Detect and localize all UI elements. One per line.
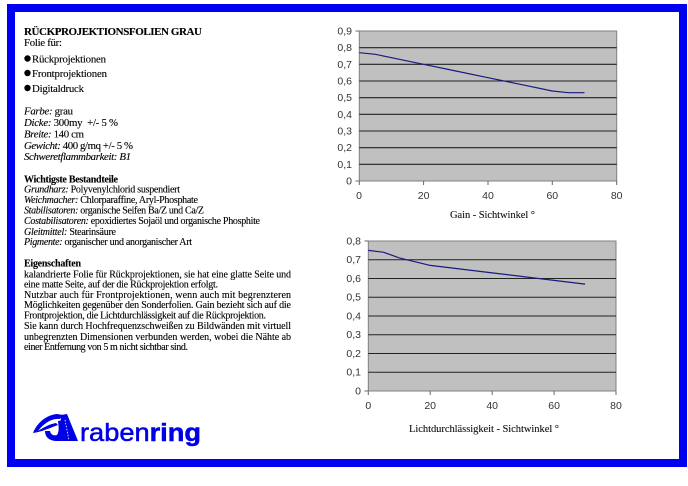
- properties: Frontprojektion, die Lichtdurchlässigkeit auf die Rückprojektion.: [24, 310, 266, 322]
- properties: eine matte Seite, auf der die Rückprojektion erfolgt.: [24, 280, 218, 290]
- x axis labels: 40: [482, 190, 494, 202]
- panel: product text: [23, 25, 292, 353]
- ingredients: Gleitmittel: Stearinsäure: [24, 227, 117, 238]
- logo: Grabenring: [33, 414, 201, 447]
- y axis labels: 0,3: [337, 126, 352, 138]
- grid lines: [359, 48, 617, 164]
- y axis labels: 0,3: [346, 329, 361, 341]
- logo wordmark: rabenring: [80, 419, 201, 447]
- data line: [368, 250, 585, 284]
- y axis labels: 0,2: [337, 142, 352, 154]
- properties: [24, 258, 292, 353]
- x axis labels: [365, 400, 622, 412]
- x axis labels: 80: [611, 190, 623, 202]
- y axis labels: 0,1: [346, 366, 361, 378]
- y axis labels: [337, 26, 352, 188]
- properties: Eigenschaften: [24, 258, 81, 270]
- axis ticks: [356, 31, 617, 185]
- ingredients: Costabilisatoren: epoxidiertes Sojaöl und organische Phosphite: [24, 216, 261, 227]
- x axis labels: 0: [365, 400, 371, 412]
- y axis labels: 0,1: [337, 159, 352, 171]
- x axis labels: 60: [546, 190, 558, 202]
- specifications: Gewicht: 400 g/mq +/- 5 %: [24, 140, 133, 152]
- use list: Frontprojektionen: [32, 68, 108, 80]
- y axis labels: 0: [346, 176, 352, 188]
- icon: logo mark: [33, 414, 78, 441]
- specifications: [23, 106, 133, 163]
- ingredients: Weichmacher: Chlorparaffine, Aryl-Phosphate: [24, 195, 199, 206]
- properties: unbegrenzten Dimensionen verbunden werden, wobei die Nähte ab: [24, 332, 291, 343]
- data line: [359, 53, 584, 93]
- x axis labels: 20: [418, 190, 430, 202]
- specifications: Breite: 140 cm: [24, 128, 85, 140]
- line chart: Lichtdurchlässigkeit - Sichtwinkel: [346, 236, 622, 435]
- ingredients: Wichtigste Bestandteile: [24, 174, 119, 186]
- plot area: [359, 31, 617, 181]
- y axis labels: 0,4: [346, 310, 361, 322]
- x axis labels: 40: [486, 400, 498, 412]
- ingredients: Stabilisatoren: organische Seifen Ba/Z und Ca/Z: [24, 206, 204, 216]
- use list: Folie für:: [24, 37, 62, 49]
- y axis labels: 0,8: [346, 236, 361, 248]
- grid lines: [368, 260, 616, 372]
- y axis labels: 0,5: [337, 92, 352, 104]
- properties: kalandrierte Folie für Rückprojektionen, sie hat eine glatte Seite und: [24, 270, 291, 280]
- x axis labels: 0: [356, 190, 362, 202]
- y axis labels: 0,5: [346, 292, 361, 304]
- y axis labels: 0,2: [346, 348, 361, 360]
- properties: Nutzbar auch für Frontprojektionen, wenn auch mit begrenzteren: [24, 290, 291, 301]
- y axis labels: [346, 236, 361, 398]
- y axis labels: 0,6: [346, 273, 361, 285]
- use list: Rückprojektionen: [32, 54, 107, 66]
- axis ticks: [364, 241, 616, 395]
- x axis labels: 60: [548, 400, 560, 412]
- axis title: Gain - Sichtwinkel °: [450, 210, 535, 221]
- y axis labels: 0,4: [337, 109, 352, 121]
- y axis labels: 0,7: [337, 59, 352, 71]
- y axis labels: 0,8: [337, 42, 352, 54]
- y axis labels: 0,7: [346, 254, 361, 266]
- x axis labels: 20: [424, 400, 436, 412]
- y axis labels: 0,6: [337, 76, 352, 88]
- specifications: Farbe: grau: [23, 106, 74, 118]
- properties: Sie kann durch Hochfrequenzschweißen zu Bildwänden mit virtuell: [24, 321, 291, 332]
- y axis labels: 0: [355, 386, 361, 398]
- specifications: Dicke: 300my +/- 5 %: [23, 117, 118, 129]
- line chart: Gain - Sichtwinkel: [337, 26, 623, 221]
- y axis labels: 0,9: [337, 26, 352, 38]
- axis title: Lichtdurchlässigkeit - Sichtwinkel °: [409, 424, 559, 435]
- title: RÜCKPROJEKTIONSFOLIEN GRAU: [24, 25, 202, 38]
- x axis labels: 80: [610, 400, 622, 412]
- use list: Digitaldruck: [32, 83, 85, 95]
- properties: Möglichkeiten gegenüber den Sonderfolien. Gain bezieht sich auf die: [24, 300, 292, 311]
- ingredients: [23, 174, 261, 248]
- ingredients: Pigmente: organischer und anorganischer Art: [23, 237, 192, 248]
- plot area: [368, 241, 616, 391]
- specifications: Schweretflammbarkeit: B1: [24, 151, 131, 163]
- x axis labels: [356, 190, 623, 202]
- properties: einer Entfernung von 5 m nicht sichtbar sind.: [24, 342, 188, 353]
- ingredients: Grundharz: Polyvenylchlorid suspendiert: [24, 184, 180, 196]
- use list: [24, 37, 108, 95]
